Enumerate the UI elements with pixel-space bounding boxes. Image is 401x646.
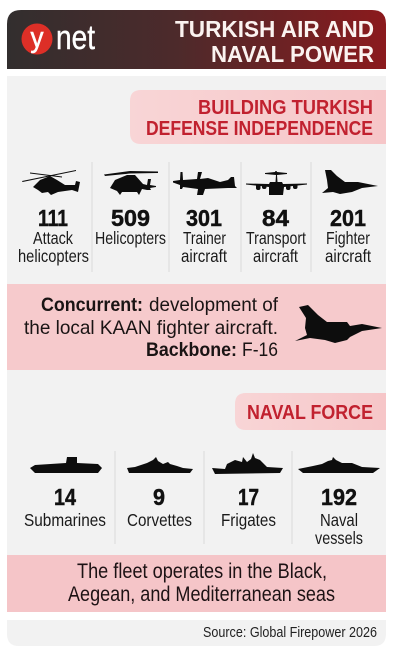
- stat: fighter aircraft: [322, 170, 378, 266]
- ynet logo: y: [30, 22, 44, 54]
- stat: frigates: Frigates: [221, 510, 276, 530]
- callout: fleet operating seas: Aegean, and Mediterranean seas: [68, 583, 335, 606]
- stat: naval vessels: 192: [321, 484, 357, 510]
- stat: trainer aircraft: [173, 172, 237, 266]
- stat: helicopters: 509: [111, 205, 150, 231]
- callout: KAAN fighter development: development of: [149, 294, 279, 316]
- title: NAVAL POWER: [211, 41, 374, 67]
- stat: naval vessels: vessels: [315, 528, 363, 548]
- stat: naval vessels: Naval: [320, 510, 358, 530]
- stat: frigates: [212, 453, 283, 530]
- heading: building Turkish defense independence: DEFENSE INDEPENDENCE: [146, 118, 373, 140]
- ynet logo: net: [56, 19, 95, 57]
- heading: building Turkish defense independence: BUILDING TURKISH: [198, 97, 373, 119]
- stat: submarines: Submarines: [24, 510, 106, 530]
- icon: helicopter: [104, 171, 158, 195]
- stat: trainer aircraft: Trainer: [183, 228, 226, 248]
- stat: corvettes: [127, 457, 193, 530]
- title: [175, 16, 374, 67]
- stat: transport aircraft: [246, 171, 307, 266]
- callout: KAAN fighter development: [7, 284, 386, 370]
- title: TURKISH AIR AND: [175, 16, 374, 42]
- icon: trainer aircraft: [173, 172, 237, 195]
- callout: KAAN fighter development: Concurrent:: [41, 294, 143, 316]
- heading: naval force: [235, 393, 386, 430]
- panel: main background: [7, 76, 386, 612]
- icon: frigate: [212, 453, 283, 474]
- heading: building Turkish defense independence: [130, 90, 386, 144]
- icon: transport aircraft: [246, 171, 307, 195]
- callout: KAAN fighter development: F-16: [242, 339, 278, 361]
- stat: corvettes: Corvettes: [127, 510, 192, 530]
- icon: attack helicopter: [22, 170, 80, 195]
- header bar: [7, 10, 386, 69]
- callout: fleet operating seas: [7, 555, 386, 612]
- source line: Source: Global Firepower 2026: [203, 625, 377, 641]
- stat: attack helicopters: Attack: [33, 228, 73, 248]
- callout: fleet operating seas: The fleet operates in the Black,: [77, 560, 327, 583]
- stat: transport aircraft: 84: [262, 205, 289, 231]
- icon: corvette: [127, 457, 193, 473]
- stat: helicopters: [95, 171, 166, 248]
- icon: submarine: [30, 457, 102, 473]
- icon: fighter jet: [322, 170, 378, 194]
- stat: fighter aircraft: Fighter: [326, 228, 370, 248]
- stat: fighter aircraft: aircraft: [325, 246, 371, 266]
- stat: attack helicopters: helicopters: [18, 246, 89, 266]
- stat: attack helicopters: 111: [38, 205, 68, 231]
- stat: trainer aircraft: 301: [186, 205, 222, 231]
- icon: KAAN fighter jet: [295, 305, 382, 343]
- stat: submarines: 14: [54, 484, 76, 510]
- icon: naval vessel: [298, 457, 380, 473]
- stat: helicopters: Helicopters: [95, 228, 166, 248]
- stat: corvettes: 9: [153, 484, 165, 510]
- stat: submarines: [24, 457, 106, 530]
- stat: fighter aircraft: 201: [330, 205, 366, 231]
- ynet logo: [22, 19, 95, 57]
- stat: transport aircraft: Transport: [246, 228, 306, 248]
- stat: naval vessels: [298, 457, 380, 548]
- callout: KAAN fighter development: Backbone:: [146, 339, 237, 361]
- callout: KAAN fighter development: the local KAAN fighter aircraft.: [24, 317, 278, 339]
- stat: frigates: 17: [238, 484, 259, 510]
- stat: trainer aircraft: aircraft: [181, 246, 227, 266]
- stat: attack helicopters: [18, 170, 89, 266]
- stat: transport aircraft: aircraft: [253, 246, 298, 266]
- heading: naval force: NAVAL FORCE: [247, 402, 373, 424]
- source line: [7, 620, 386, 646]
